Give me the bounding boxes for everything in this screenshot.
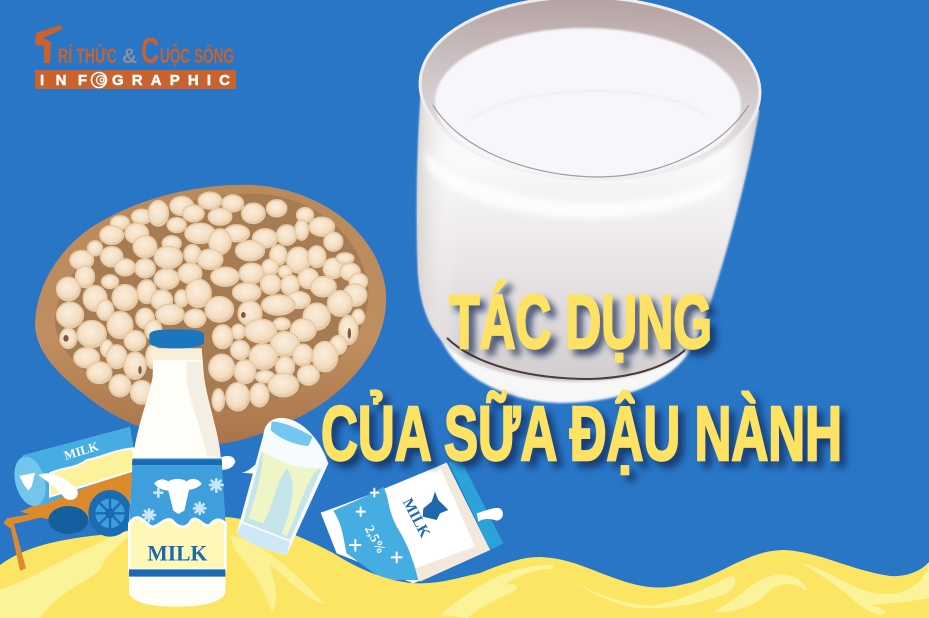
cart wheels: [48, 490, 132, 537]
wave body: [0, 517, 929, 618]
cart body: [20, 470, 137, 522]
glass liquid: [243, 452, 322, 540]
cow head icon: [154, 479, 202, 514]
glass rim: [271, 422, 313, 446]
tank label: MILK: [62, 439, 100, 463]
tank cow icon: [19, 473, 35, 491]
glass outer: [237, 418, 328, 555]
photo: wooden bowl of soybeans: [35, 185, 386, 444]
small glass of milk: [237, 418, 328, 555]
soybeans: [57, 192, 367, 411]
carton blue panel: [333, 487, 418, 580]
milk splash from carton: [477, 508, 503, 522]
carton asterisks: [350, 489, 402, 562]
logo band: [35, 70, 236, 89]
yellow milk wave: [0, 517, 929, 618]
bottle milk splash: [217, 456, 235, 470]
carton blue seal: [448, 462, 503, 550]
logo roof T: [35, 25, 63, 63]
photo: glass of soy milk: [417, 0, 763, 403]
glass rim: [417, 0, 763, 185]
carton milk label: MILK: [399, 496, 433, 540]
carton body: [321, 463, 490, 583]
bottle right shading: [187, 362, 221, 457]
bottle milk label: MILK: [147, 541, 207, 566]
logo: Tri Thuc & Cuoc Song Infographic: UỘC SỐNG: [160, 44, 234, 68]
bottle bottom strip: [129, 569, 225, 577]
glass body: [417, 60, 759, 382]
rim lower line: [433, 105, 749, 177]
carton percent label: 2,5%: [362, 523, 389, 556]
logo: Tri Thuc & Cuoc Song Infographic: C: [141, 30, 159, 71]
bottle label: [129, 458, 225, 533]
glass bottom dark line: [447, 338, 685, 379]
logo wordmark: RÍ THỨC: [58, 44, 117, 68]
logo band text: INF: [40, 72, 87, 89]
flower decorations: [143, 479, 223, 521]
bowl inner: [55, 194, 368, 411]
bottle label top strip: [132, 459, 222, 465]
glass upper band: [424, 150, 735, 218]
tank: [16, 427, 137, 505]
bottle body: [129, 348, 225, 607]
glass base: [237, 523, 290, 555]
logo band text end: GRAPHIC: [112, 72, 230, 89]
logo: Tri Thuc & Cuoc Song Infographic: &: [122, 45, 137, 68]
bottle label cream area: [129, 517, 225, 570]
bean hilum marks: [63, 312, 351, 374]
cart tow bar: [3, 512, 45, 571]
glass side shading: [417, 60, 759, 382]
tanker cart: [3, 427, 137, 571]
milk bottle: [129, 329, 235, 607]
bottle neck ring: [153, 348, 202, 360]
milk surface highlight: [470, 91, 705, 120]
title: [321, 280, 842, 477]
carton side fold: [415, 463, 490, 582]
tank yellow band: [50, 448, 135, 497]
wave highlights: [0, 530, 929, 618]
milk carton: [321, 462, 503, 583]
bottle cap: [149, 329, 204, 348]
logo swirl O: [92, 72, 106, 88]
milk drip: [242, 462, 258, 474]
bowl: [35, 185, 386, 444]
tank milk pour: [38, 473, 78, 500]
milk surface: [434, 25, 742, 181]
tank end cap: [9, 453, 51, 510]
glass white base: [440, 335, 695, 403]
carton cow icon: [423, 492, 448, 520]
logo: Tri Thuc & Cuoc Song Infographic: [35, 25, 236, 89]
title line 1: TÁC DỤNG: [449, 280, 712, 365]
glass liquid highlight: [248, 452, 318, 537]
